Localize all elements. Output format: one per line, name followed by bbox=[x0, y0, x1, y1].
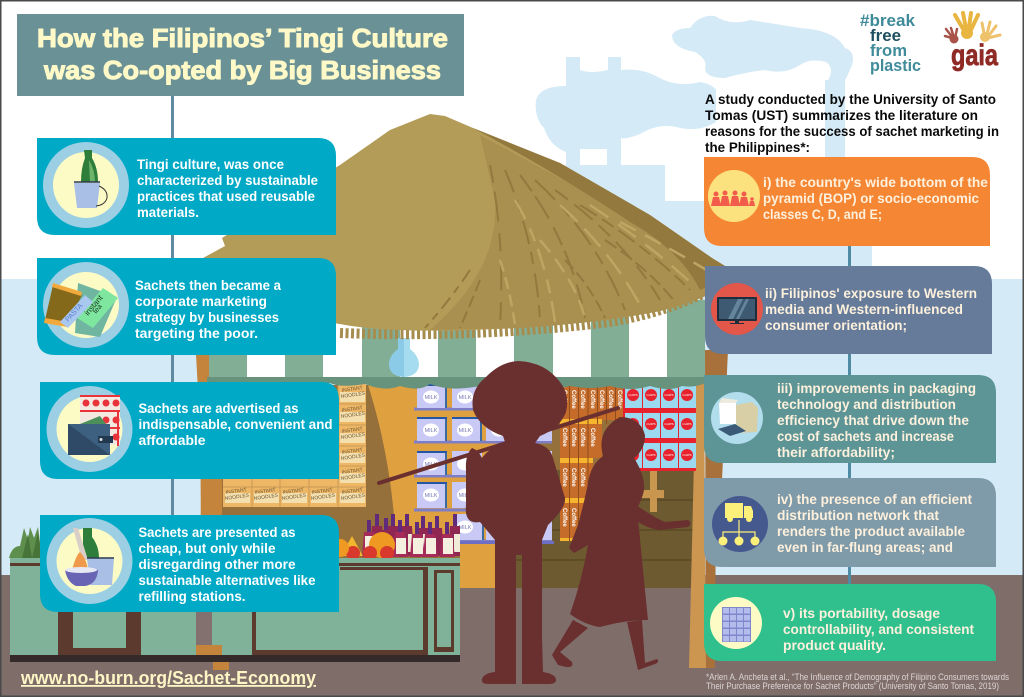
text: packaging improvements: efficiency that drive down the bbox=[777, 413, 969, 428]
panel: sachets advertised bbox=[40, 382, 339, 479]
coffee sachets: Coffee bbox=[607, 390, 613, 409]
roof mottled shade bbox=[430, 135, 738, 330]
panel: sachets as marketing strategy bbox=[37, 258, 336, 355]
text: sachets presented as cheap: cheap, but only while bbox=[138, 541, 276, 556]
text: tingi culture bbox=[137, 157, 318, 220]
plant bbox=[9, 527, 42, 558]
icon: television bbox=[711, 283, 763, 335]
panel: iv) distribution network bbox=[704, 478, 996, 567]
text: western media: consumer orientation; bbox=[765, 318, 907, 333]
right brace bbox=[705, 350, 728, 668]
text: portability: product quality. bbox=[783, 638, 886, 653]
text: sachets advertised: affordable bbox=[138, 433, 206, 448]
icon: sachets: tea bbox=[92, 303, 104, 315]
text: distribution network: renders the product available bbox=[777, 524, 965, 539]
left timeline line bbox=[171, 96, 174, 526]
milk boxes: MILK bbox=[459, 493, 472, 499]
text: bottom of the pyramid: classes C, D, and E; bbox=[763, 207, 882, 222]
icon: sachets: PASTA bbox=[64, 302, 85, 323]
right timeline line bbox=[848, 240, 851, 590]
coffee sachets: Coffee bbox=[589, 428, 595, 447]
instant noodles boxes: NOODLES bbox=[340, 473, 366, 482]
icon: sachets: instant bbox=[83, 293, 105, 317]
instant noodles boxes: INSTANT bbox=[282, 487, 304, 496]
chips packets: CHIPS bbox=[682, 453, 692, 457]
milk boxes: MILK bbox=[425, 428, 438, 434]
text: sachets as marketing strategy: corporate marketing bbox=[135, 294, 267, 309]
text: sachets advertised: indispensable, convenient and bbox=[138, 417, 332, 432]
instant noodles boxes: INSTANT bbox=[254, 487, 276, 496]
instant noodles boxes: NOODLES bbox=[310, 493, 336, 502]
text: packaging improvements: technology and distribution bbox=[777, 397, 956, 412]
logo: break free from plastic: plastic bbox=[870, 56, 921, 75]
stall back wall bbox=[209, 385, 695, 588]
text: sachets advertised: Sachets are advertised as bbox=[138, 401, 298, 416]
title banner bbox=[17, 14, 464, 96]
title text: How the Filipinos’ Tingi Culture bbox=[37, 23, 448, 53]
icon: sachets bbox=[43, 262, 129, 348]
chips packets: CHIPS bbox=[664, 393, 674, 397]
silhouette: man bbox=[466, 361, 567, 684]
coffee sachets: Coffee bbox=[579, 468, 585, 487]
text: sachets as marketing strategy: targeting the poor. bbox=[135, 326, 258, 341]
coffee sachets: Coffee bbox=[589, 390, 595, 409]
intro text: UST study: reasons for the success of sachet marketing in bbox=[705, 124, 999, 139]
instant noodles boxes: INSTANT bbox=[341, 467, 363, 476]
wine bottles bbox=[362, 514, 460, 557]
footnote bbox=[706, 672, 1009, 691]
text: sachets presented as cheap: Sachets are presented as bbox=[138, 525, 296, 540]
chips packets: CHIPS bbox=[646, 453, 656, 457]
coffee sachets: Coffee bbox=[579, 428, 585, 447]
text: portability: controllability, and consistent bbox=[783, 622, 974, 637]
coffee sachets: Coffee bbox=[561, 390, 567, 409]
thatched roof bbox=[190, 114, 738, 334]
icon: wallet and sachets bbox=[46, 386, 132, 472]
text: packaging improvements bbox=[777, 381, 976, 460]
panel: tingi culture bbox=[37, 138, 336, 235]
coffee sachets: Coffee bbox=[579, 390, 585, 409]
instant noodles boxes bbox=[223, 384, 366, 507]
right post bbox=[689, 378, 706, 668]
milk boxes: MILK bbox=[459, 525, 472, 531]
wooden cross stand bbox=[638, 468, 664, 512]
icon: truck and network bbox=[712, 496, 768, 552]
instant noodles boxes: NOODLES bbox=[253, 493, 279, 502]
text: distribution network: iv) the presence of an efficient bbox=[777, 492, 972, 507]
text: sachets presented as cheap bbox=[138, 525, 316, 604]
milk boxes: MILK bbox=[425, 395, 438, 401]
coffee sachets: Coffee bbox=[561, 468, 567, 487]
coffee sachets: Coffee bbox=[570, 390, 576, 409]
text: tingi culture: materials. bbox=[137, 205, 199, 220]
panel: i) bottom of the pyramid bbox=[704, 157, 990, 246]
text: western media bbox=[765, 286, 977, 333]
instant noodles boxes: NOODLES bbox=[340, 391, 366, 400]
instant noodles boxes: INSTANT bbox=[341, 447, 363, 456]
panel: ii) western media bbox=[705, 266, 992, 354]
title text: was Co-opted by Big Business bbox=[43, 55, 441, 85]
intro text: UST study bbox=[705, 92, 999, 155]
text: packaging improvements: iii) improvements in packaging bbox=[777, 381, 976, 396]
ground bbox=[0, 575, 1024, 697]
sky background bbox=[0, 279, 1024, 576]
factory silhouette with smoke bbox=[536, 16, 872, 280]
text: sachets advertised bbox=[138, 401, 332, 448]
instant noodles boxes: NOODLES bbox=[340, 493, 366, 502]
icon: sachet sheet bbox=[710, 597, 762, 649]
logo: gaia bbox=[945, 13, 1000, 72]
orange curtain bbox=[368, 385, 500, 588]
icon: bottle, brush, cup and bowl bbox=[46, 518, 132, 604]
instant noodles boxes: INSTANT bbox=[341, 487, 363, 496]
instant noodles boxes: NOODLES bbox=[224, 493, 250, 502]
text: sachets presented as cheap: sustainable alternatives like bbox=[138, 573, 316, 588]
website link: www.no-burn.org/Sachet-Economy bbox=[20, 668, 316, 688]
icon: people bbox=[708, 170, 760, 222]
text: distribution network: even in far-flung areas; and bbox=[777, 540, 953, 555]
coffee sachets: Coffee bbox=[561, 428, 567, 447]
intro text: UST study: the Philippines*: bbox=[705, 140, 810, 155]
chips packets: CHIPS bbox=[646, 422, 656, 426]
text: bottom of the pyramid: pyramid (BOP) or socio-economic bbox=[763, 191, 979, 206]
roof shaded edge bbox=[473, 128, 738, 290]
instant noodles boxes: INSTANT bbox=[341, 405, 363, 414]
text: sachets presented as cheap: disregarding other more bbox=[138, 557, 296, 572]
coffee sachets: Coffee bbox=[561, 508, 567, 527]
text: sachets as marketing strategy: strategy by businesses bbox=[135, 310, 279, 325]
chips packets: CHIPS bbox=[664, 422, 674, 426]
chips packets: CHIPS bbox=[646, 393, 656, 397]
instant noodles boxes: INSTANT bbox=[311, 487, 333, 496]
counter bbox=[10, 558, 460, 662]
roof fringe bbox=[340, 277, 735, 334]
coffee sachets: Coffee bbox=[616, 390, 622, 409]
icon: bottle and cup bbox=[43, 142, 129, 228]
instant noodles boxes: NOODLES bbox=[340, 411, 366, 420]
awning bbox=[207, 300, 705, 389]
milk boxes: MILK bbox=[459, 428, 472, 434]
logo: break free from plastic: free bbox=[870, 26, 901, 45]
fruit bbox=[331, 532, 395, 560]
text: distribution network: distribution network that bbox=[777, 508, 940, 523]
panel: sachets presented as cheap bbox=[40, 515, 339, 612]
roof base bbox=[190, 114, 738, 331]
panel: iii) packaging improvements bbox=[704, 375, 996, 463]
chips packets bbox=[623, 385, 696, 471]
text: tingi culture: characterized by sustainable bbox=[137, 173, 318, 188]
instant noodles boxes: NOODLES bbox=[340, 453, 366, 462]
coffee sachets: Coffee bbox=[570, 468, 576, 487]
text: sachets as marketing strategy: Sachets then became a bbox=[135, 278, 281, 293]
text: bottom of the pyramid: i) the country's wide bottom of the bbox=[763, 175, 988, 190]
coffee sachets: Coffee bbox=[570, 508, 576, 527]
text: packaging improvements: their affordability; bbox=[777, 445, 895, 460]
milk boxes: MILK bbox=[425, 462, 438, 468]
logo: break free from plastic: #break bbox=[860, 11, 916, 30]
instant noodles boxes: INSTANT bbox=[341, 426, 363, 435]
icon: packaging boxes bbox=[711, 392, 763, 444]
instant noodles boxes: NOODLES bbox=[340, 432, 366, 441]
text: portability bbox=[783, 606, 974, 653]
coffee sachets: Coffee bbox=[570, 428, 576, 447]
milk boxes: MILK bbox=[459, 395, 472, 401]
dark wood wall bbox=[497, 470, 694, 588]
milk boxes: MILK bbox=[425, 493, 438, 499]
milk boxes bbox=[414, 384, 554, 544]
coffee sachets: Coffee bbox=[598, 390, 604, 409]
text: western media: media and Western-influenced bbox=[765, 302, 963, 317]
text: portability: v) its portability, dosage bbox=[783, 606, 940, 621]
left post bbox=[195, 340, 229, 670]
chips packets: CHIPS bbox=[682, 393, 692, 397]
light bulb bbox=[389, 338, 419, 377]
thatch texture bbox=[425, 165, 715, 328]
text: bottom of the pyramid bbox=[763, 175, 988, 222]
logo: break free from plastic bbox=[860, 11, 921, 75]
coffee sachets: Coffee bbox=[588, 520, 594, 539]
instant noodles boxes: INSTANT bbox=[225, 487, 247, 496]
text: western media: ii) Filipinos' exposure to Western bbox=[765, 286, 977, 301]
milk boxes: MILK bbox=[493, 428, 506, 434]
text: packaging improvements: cost of sachets and increase bbox=[777, 429, 954, 444]
logo: break free from plastic: from bbox=[870, 41, 907, 60]
carrying pole bbox=[379, 408, 618, 483]
intro text: UST study: Tomas (UST) summarizes the literature on bbox=[705, 108, 978, 123]
icon: hands bbox=[945, 13, 1000, 44]
title text bbox=[37, 23, 448, 85]
instant noodles boxes: NOODLES bbox=[281, 493, 307, 502]
intro text: UST study: A study conducted by the University of Santo bbox=[705, 92, 996, 107]
logo: gaia: gaia bbox=[951, 39, 998, 72]
text: sachets presented as cheap: refilling stations. bbox=[138, 589, 246, 604]
chips packets: CHIPS bbox=[664, 453, 674, 457]
text: sachets as marketing strategy bbox=[135, 278, 281, 341]
silhouette: woman bbox=[552, 417, 690, 670]
text: tingi culture: practices that used reusable bbox=[137, 189, 315, 204]
chips packets: CHIPS bbox=[682, 422, 692, 426]
chips packets: CHIPS bbox=[628, 393, 638, 397]
instant noodles boxes: INSTANT bbox=[341, 385, 363, 394]
text: tingi culture: Tingi culture, was once bbox=[137, 157, 284, 172]
coffee sachets bbox=[560, 385, 624, 541]
panel: v) portability bbox=[704, 584, 996, 661]
text: distribution network bbox=[777, 492, 972, 555]
market stall bbox=[195, 300, 728, 670]
